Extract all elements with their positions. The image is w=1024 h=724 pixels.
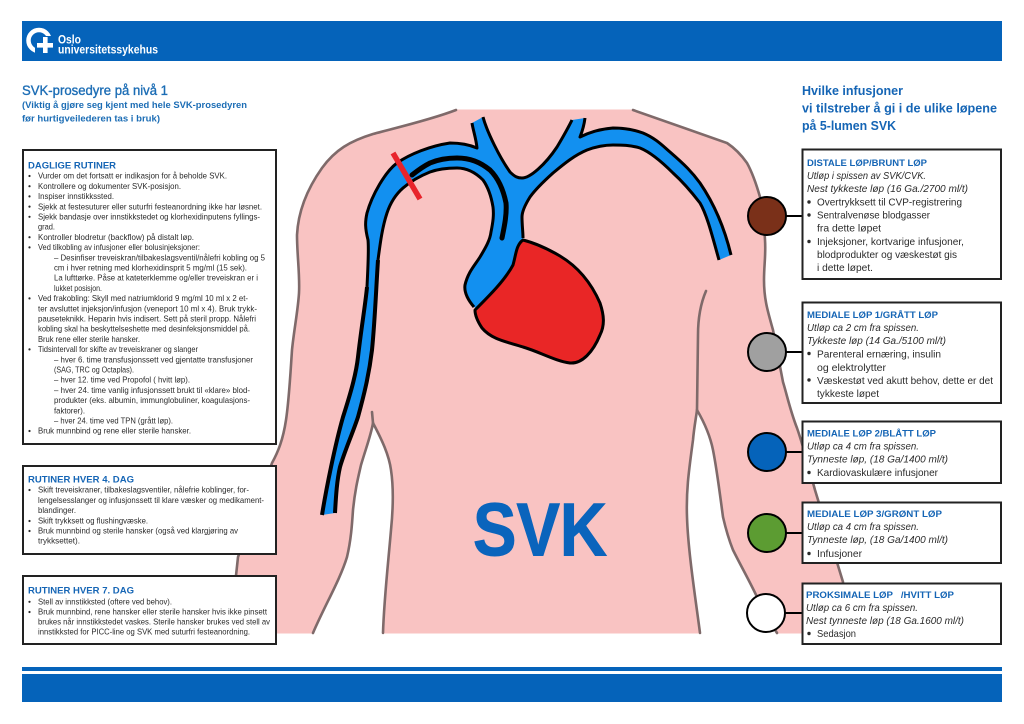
list: rutiner hver 4. dag: trykksettet).: [38, 536, 80, 546]
list: rutiner hver 7. dag: brukes når innstikkstedet vaskes. Sterile hansker brukes ved stell av: [38, 617, 271, 627]
description: mediale løp 3: Tynneste løp, (18 Ga/1400 ml/t): [807, 535, 948, 546]
icon: hospital logo: [28, 30, 56, 54]
panel: distale løp: [802, 150, 1001, 279]
list: daglige rutiner: Ved tilkobling av infusjoner eller bolusinjeksjoner:: [38, 242, 200, 252]
right heading: [802, 84, 997, 133]
list: daglige rutiner: Kontrollere og dokumenter SVK-posisjon.: [38, 181, 181, 191]
icon: white lumen dot: [747, 594, 785, 632]
list: distale løp: Injeksjoner, kortvarige infusjoner,: [817, 237, 964, 248]
panel: mediale løp 1: [802, 302, 1001, 403]
logo text: Oslo: [58, 34, 81, 46]
left heading: før hurtigveilederen tas i bruk): [22, 114, 160, 124]
right heading: Hvilke infusjoner: [802, 84, 903, 98]
right heading: vi tilstreber å gi i de ulike løpene: [802, 102, 997, 116]
description: proksimale løp: Nest tynneste løp (18 Ga.1600 ml/t): [806, 616, 964, 627]
description: mediale løp 1: [807, 323, 946, 347]
left heading: SVK-prosedyre på nivå 1: [22, 83, 168, 98]
right heading: på 5-lumen SVK: [802, 119, 896, 133]
description: mediale løp 1: Tykkeste løp (14 Ga./5100 ml/t): [807, 336, 946, 347]
list: daglige rutiner: Tidsintervall for skifte av treveiskraner og slanger: [38, 344, 198, 354]
veins: [322, 117, 731, 515]
description: distale løp: [807, 171, 968, 195]
description: distale løp: Nest tykkeste løp (16 Ga./2700 ml/t): [807, 184, 968, 195]
list: rutiner hver 7. dag: innstikksted for PICC-line og SVK med suturfri festeanordning.: [38, 627, 250, 637]
list: daglige rutiner: Sjekk at festesuturer eller suturfri festeanordning ikke har løsnet.: [38, 201, 262, 211]
left heading: [22, 83, 247, 124]
panel: mediale løp 2: [802, 422, 1001, 483]
heading: rutiner hver 4. dag: RUTINER HVER 4. DAG: [28, 475, 134, 486]
panel: rutiner hver 4. dag: [23, 466, 276, 554]
icon: green lumen dot: [748, 514, 786, 552]
list: daglige rutiner: Bruk rene eller sterile hansker.: [38, 334, 140, 344]
list: distale løp: i dette løpet.: [817, 263, 873, 274]
list: rutiner hver 7. dag: Bruk munnbind, rene hansker eller sterile hansker hvis ikke pinsett: [38, 607, 268, 617]
list: mediale løp 1: Væskestøt ved akutt behov, dette er det: [817, 376, 993, 387]
heading: distale løp: DISTALE LØP/BRUNT LØP: [807, 158, 928, 169]
connector lines: [785, 216, 803, 613]
header bar with logo: [22, 21, 1002, 61]
description: distale løp: Utløp i spissen av SVK/CVK.: [807, 171, 926, 182]
list: daglige rutiner: faktorer).: [54, 405, 85, 415]
list: daglige rutiner: ter avsluttet injeksjon/infusjon (veneport 10 ml x 4). Bruk trykk-: [38, 303, 257, 313]
list: daglige rutiner: – hver 12. time ved Propofol ( hvitt løp).: [54, 375, 190, 385]
body silhouette: [234, 110, 860, 634]
list: daglige rutiner: Ved frakobling: Skyll med natriumklorid 9 mg/ml 10 ml x 2 et-: [38, 293, 248, 303]
SVK label: SVK: [473, 488, 607, 572]
list: distale løp: Sentralvenøse blodgasser: [817, 210, 931, 222]
insertion site marker: [393, 153, 420, 199]
list: daglige rutiner: lukket posisjon.: [54, 283, 102, 293]
list: daglige rutiner: pauseteknikk. Heparin hvis indisert. Sett på steril propp. Nålefri: [38, 314, 256, 324]
list: rutiner hver 4. dag: lengelsesslanger og infusjonssett til klare væsker og medikament-: [38, 495, 264, 505]
list: daglige rutiner: Bruk munnbind og rene eller sterile hansker.: [38, 426, 191, 436]
list: rutiner hver 4. dag: [28, 485, 264, 546]
logo text: universitetssykehus: [58, 44, 158, 56]
description: mediale løp 2: Utløp ca 4 cm fra spissen.: [807, 442, 919, 452]
list: mediale løp 1: og elektrolytter: [817, 363, 887, 374]
footer bars: [22, 667, 1002, 702]
logo text: [58, 34, 158, 56]
heading: mediale løp 1: MEDIALE LØP 1/GRÅTT LØP: [807, 310, 939, 321]
description: mediale løp 2: Tynneste løp, (18 Ga/1400 ml/t): [807, 454, 948, 466]
list: mediale løp 1: [807, 350, 993, 400]
list: daglige rutiner: Sjekk bandasje over innstikkstedet og klorhexidinputens fyllings-: [38, 212, 260, 222]
list: daglige rutiner: produkter (eks. albumin, immunglobuliner, koagulasjons-: [54, 395, 250, 405]
description: mediale løp 3: Utløp ca 4 cm fra spissen.: [807, 522, 919, 533]
list: daglige rutiner: Inspiser innstikkssted.: [38, 191, 114, 201]
icon: grey lumen dot: [748, 333, 786, 371]
panel: rutiner hver 7. dag: [23, 576, 276, 644]
list: mediale løp 3: Infusjoner: [817, 549, 863, 560]
list: daglige rutiner: (SAG, TRC og Octaplas).: [54, 364, 134, 374]
list: distale løp: blodprodukter og væskestøt gis: [817, 250, 957, 261]
heading: daglige rutiner: DAGLIGE RUTINER: [28, 160, 116, 172]
list: distale løp: [807, 198, 964, 274]
heading: proksimale løp: PROKSIMALE LØP /HVITT LØP: [806, 590, 955, 601]
list: daglige rutiner: [28, 171, 265, 436]
list: rutiner hver 7. dag: [28, 596, 271, 637]
list: daglige rutiner: – hver 24. time vanlig infusjonssett brukt til «klare» blod-: [54, 385, 250, 395]
list: daglige rutiner: – hver 6. time transfusjonssett ved gjentatte transfusjoner: [54, 354, 253, 364]
list: rutiner hver 7. dag: Stell av innstikksted (oftere ved behov).: [38, 596, 172, 606]
list: daglige rutiner: grad.: [38, 222, 55, 232]
description: proksimale løp: Utløp ca 6 cm fra spissen.: [806, 603, 918, 614]
panel: mediale løp 3: [802, 502, 1001, 563]
heading: mediale løp 3: MEDIALE LØP 3/GRØNT LØP: [807, 509, 943, 520]
heart: [475, 240, 603, 363]
list: mediale løp 1: tykkeste løpet: [817, 389, 879, 400]
list: daglige rutiner: – hver 24. time ved TPN (grått løp).: [54, 416, 173, 426]
icon: blue lumen dot: [748, 433, 786, 471]
list: proksimale løp: Sedasjon: [817, 629, 856, 640]
list: mediale løp 2: Kardiovaskulære infusjoner: [817, 468, 939, 479]
list: daglige rutiner: Vurder om det fortsatt er indikasjon for å beholde SVK.: [38, 171, 227, 181]
description: mediale løp 2: [807, 442, 948, 466]
list: rutiner hver 4. dag: Skift trykksett og flushingvæske.: [38, 516, 148, 526]
list: rutiner hver 4. dag: Bruk munnbind og sterile hansker (også ved klargjøring av: [38, 526, 239, 536]
list: distale løp: Overtrykksett til CVP-registrering: [817, 198, 962, 208]
description: mediale løp 1: Utløp ca 2 cm fra spissen.: [807, 323, 919, 334]
heading: mediale løp 2: MEDIALE LØP 2/BLÅTT LØP: [807, 428, 937, 440]
catheter: [412, 158, 506, 238]
list: daglige rutiner: – Desinfiser treveiskran/tilbakeslagsventil/nålefri kobling og 5: [54, 252, 265, 262]
panel: daglige rutiner: [23, 150, 276, 444]
left heading: (Viktig å gjøre seg kjent med hele SVK-prosedyren: [22, 100, 247, 111]
icon: brown lumen dot: [748, 197, 786, 235]
description: mediale løp 3: [807, 522, 948, 546]
list: daglige rutiner: Kontroller blodretur (backflow) på distalt løp.: [38, 232, 194, 242]
list: daglige rutiner: kobling skal ha beskyttelseshette med desinfeksjonsmiddel på.: [38, 324, 250, 334]
description: proksimale løp: [806, 603, 964, 627]
list: rutiner hver 4. dag: blandinger.: [38, 505, 76, 515]
list: mediale løp 1: Parenteral ernæring, insulin: [817, 350, 941, 360]
list: daglige rutiner: La lufttørke. Påse at kateterklemme og/eller treveiskran er i: [54, 273, 258, 283]
list: distale løp: fra dette løpet: [817, 224, 881, 234]
list: rutiner hver 4. dag: Skift treveiskraner, tilbakeslagsventiler, nålefrie koblinger, for-: [38, 485, 249, 495]
heading: rutiner hver 7. dag: RUTINER HVER 7. DAG: [28, 585, 134, 596]
panel: proksimale løp: [802, 584, 1001, 644]
list: daglige rutiner: cm i hver retning med klorhexidinsprit 5 mg/ml (15 sek).: [54, 262, 247, 272]
